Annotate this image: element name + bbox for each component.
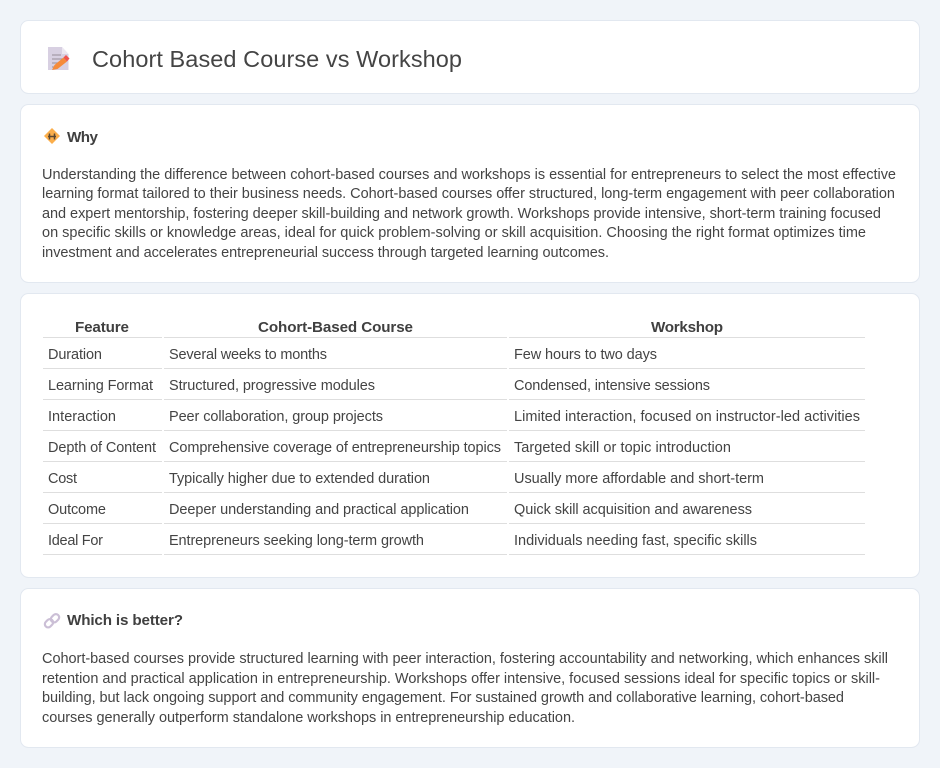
row: interaction: Interaction — [48, 409, 116, 425]
row: duration: Few hours to two days — [514, 347, 657, 363]
text block: why paragraph: Understanding the difference between cohort-based courses and workshops is essential for entrepreneurs to select the most effective — [42, 167, 896, 183]
row: cost: Typically higher due to extended duration — [169, 471, 430, 487]
row: ideal for: Ideal For — [48, 533, 103, 549]
row: learning format — [48, 378, 710, 394]
row: learning format: Learning Format — [48, 378, 153, 394]
row: outcome: Outcome — [48, 502, 106, 518]
row: ideal for: Individuals needing fast, specific skills — [514, 533, 757, 549]
panel: comparison table — [20, 294, 920, 578]
row: outcome: Deeper understanding and practical application — [169, 502, 469, 518]
row: learning format: Structured, progressive modules — [169, 378, 375, 394]
text block: why paragraph: on specific skills or knowledge areas, ideal for quick problem-solving or skill acquisition. Choosing the right format optimizes time — [42, 225, 866, 241]
table header: Cohort-Based Course — [258, 319, 413, 336]
row: interaction — [48, 409, 860, 425]
row: interaction: Limited interaction, focused on instructor-led activities — [514, 409, 860, 425]
row: outcome — [48, 502, 752, 518]
panel: which is better — [20, 588, 920, 748]
row: cost: Usually more affordable and short-term — [514, 471, 764, 487]
text block: which is better paragraph: retention and practical application in entrepreneurship. Workshops offer intensive, focused sessions ideal for specific topics or skill- — [42, 671, 880, 687]
text block: which is better paragraph: Cohort-based courses provide structured learning with peer interaction, fostering accountability and networking, which enhances skill — [42, 651, 888, 667]
panel: why — [20, 104, 920, 282]
row: duration: Duration — [48, 347, 102, 363]
row: interaction: Peer collaboration, group projects — [169, 409, 383, 425]
text block: which is better paragraph: courses generally outperform standalone workshops in entrepreneurship education. — [42, 710, 575, 726]
row: depth of content — [48, 440, 731, 456]
text block: which is better paragraph — [42, 651, 888, 726]
icon: memo with pencil — [48, 47, 70, 70]
text block: why paragraph — [42, 167, 896, 261]
table header: Workshop — [651, 319, 723, 336]
text block: why paragraph: investment and accelerates entrepreneurial success through targeted learning outcomes. — [42, 245, 609, 261]
heading: which is better: Which is better? — [67, 612, 183, 629]
text block: why paragraph: learning format tailored to their business needs. Cohort-based courses offer structured, long-term engagement with peer collaboration — [42, 186, 895, 202]
title text: Cohort Based Course vs Workshop — [92, 46, 462, 72]
icon: chain link — [44, 613, 60, 629]
icon: orange diamond sign — [44, 128, 60, 144]
row: ideal for — [48, 533, 757, 549]
row: depth of content: Depth of Content — [48, 440, 156, 456]
row: depth of content: Targeted skill or topic introduction — [514, 440, 731, 456]
panel: title — [20, 20, 920, 94]
row: duration: Several weeks to months — [169, 347, 327, 363]
table header — [75, 319, 723, 336]
row: depth of content: Comprehensive coverage of entrepreneurship topics — [169, 440, 501, 456]
row: learning format: Condensed, intensive sessions — [514, 378, 710, 394]
row: cost: Cost — [48, 471, 77, 487]
row: outcome: Quick skill acquisition and awareness — [514, 502, 752, 518]
row: cost — [48, 471, 764, 487]
row: ideal for: Entrepreneurs seeking long-term growth — [169, 533, 424, 549]
text block: which is better paragraph: building, but lack ongoing support and community engagement. For sustained growth and collaborative learning, cohort-based — [42, 690, 844, 706]
table header: Feature — [75, 319, 129, 336]
heading: why: Why — [67, 129, 99, 146]
text block: why paragraph: and expert mentorship, fostering deeper skill-building and network growth. Workshops provide intensive, short-term training focused — [42, 206, 881, 222]
row: duration — [48, 347, 657, 363]
